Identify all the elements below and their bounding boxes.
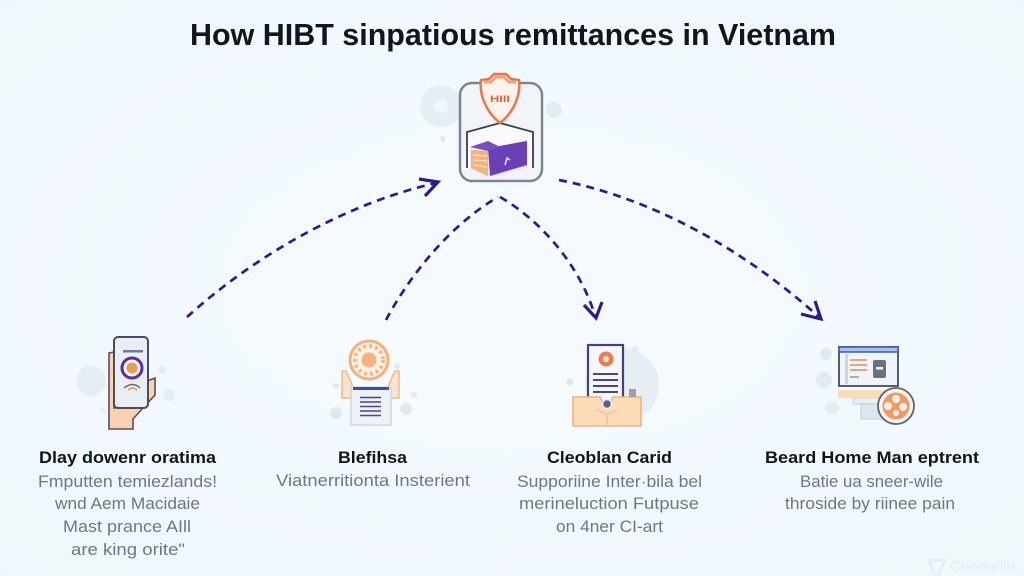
- icon: gear and document: [330, 341, 417, 425]
- text block: card step: on 4ner CI-art: [556, 517, 663, 536]
- arrow: centre to card: [500, 197, 602, 318]
- text block: card step: Supporiine Inter·bila bel: [517, 472, 702, 491]
- text block: phone step: wnd Aem Macidaie: [54, 494, 200, 513]
- text block: home management step: Batie ua sneer-wile: [800, 472, 943, 491]
- panel: second step: [276, 341, 470, 490]
- icon: hand holding phone: [76, 337, 175, 429]
- icon: central shield and box: [420, 74, 562, 181]
- heading: home management step: Beard Home Man eptrent: [765, 448, 979, 467]
- text block: second step: Viatnerritionta Insterient: [276, 471, 470, 490]
- text block: home management step: [785, 472, 955, 513]
- arrow: phone to centre: [187, 179, 438, 317]
- text block: card step: merineluction Futpuse: [519, 494, 699, 513]
- icon: document in envelope: [566, 345, 659, 426]
- text block: phone step: Mast prance AIll: [63, 517, 191, 536]
- panel: home management step: [765, 347, 979, 513]
- text block: home management step: throside by riinee pain: [785, 494, 955, 513]
- text block: phone step: [38, 472, 217, 559]
- heading: second step: Blefihsa: [338, 448, 408, 467]
- text block: card step: [517, 472, 702, 536]
- icon: central shield and box: HIII: [490, 94, 510, 104]
- heading: card step: Cleoblan Carid: [547, 448, 672, 467]
- arrow: second item to centre: [386, 197, 498, 320]
- arrow: centre to home management: [559, 180, 821, 319]
- heading: phone step: Dlay dowenr oratima: [39, 448, 217, 467]
- text block: phone step: Fmputten temiezlands!: [38, 472, 217, 491]
- title: How HIBT sinpatious remittances in Vietnam: [190, 17, 836, 52]
- watermark: Coeounlu: [950, 558, 1015, 575]
- text block: phone step: are king orite": [71, 540, 185, 559]
- icon: monitor and badge: [816, 347, 914, 424]
- panel: card step: [517, 345, 702, 536]
- panel: phone step: [38, 337, 217, 559]
